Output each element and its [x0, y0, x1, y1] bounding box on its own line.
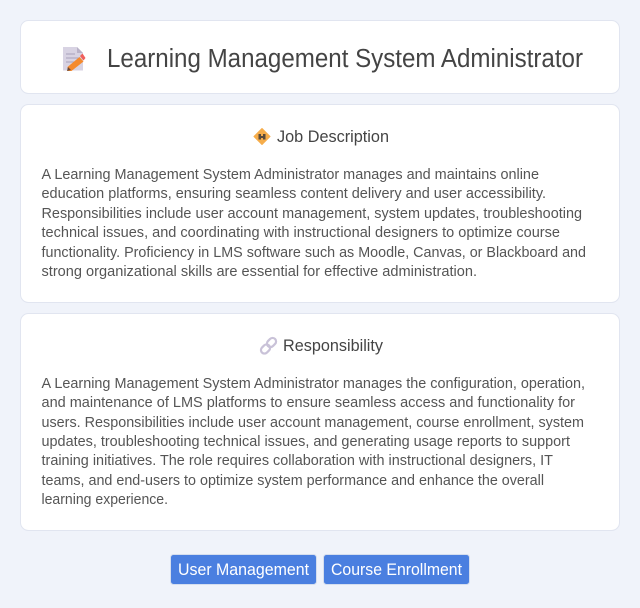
job description heading: Job Description [277, 128, 389, 146]
responsibility text: updates, troubleshooting technical issues, and generating usage reports to support [42, 434, 570, 450]
job description text: A Learning Management System Administrator manages and maintains online [42, 167, 539, 183]
responsibility text: and maintenance of LMS platforms to ensure seamless access and functionality for [42, 395, 575, 411]
responsibility text: users. Responsibilities include user account management, course enrollment, system [42, 415, 584, 431]
responsibility text: A Learning Management System Administrator manages the configuration, operation, [42, 376, 585, 392]
button: user management [170, 554, 316, 584]
responsibility text: teams, and end-users to optimize system performance and enhance the overall [42, 473, 544, 489]
responsibility text: training initiatives. The role requires collaboration with instructional designers, IT [42, 453, 553, 469]
icon: chain link [259, 336, 278, 355]
title text: Learning Management System Administrator [107, 45, 583, 73]
responsibility heading: Responsibility [283, 337, 384, 355]
job description text [42, 167, 586, 280]
button: user management: User Management [178, 561, 309, 579]
responsibility text [42, 376, 585, 508]
job description text: technical issues, and coordinating with instructional designers to optimize course [42, 225, 560, 241]
job description text: strong organizational skills are essential for effective administration. [42, 264, 477, 280]
panel: title [20, 20, 620, 94]
responsibility text: learning experience. [42, 492, 168, 508]
job description text: Responsibilities include user account management, system updates, troubleshooting [42, 206, 582, 222]
job description text: functionality. Proficiency in LMS software such as Moodle, Canvas, or Blackboard and [42, 245, 586, 261]
icon: document with pencil [63, 47, 86, 71]
panel: responsibility [20, 314, 620, 530]
job description text: education platforms, ensuring seamless content delivery and user accessibility. [42, 186, 546, 202]
icon: orange diamond [254, 128, 270, 144]
panel: job description [20, 104, 620, 302]
button: course enrollment [324, 554, 470, 584]
button: course enrollment: Course Enrollment [331, 561, 462, 579]
